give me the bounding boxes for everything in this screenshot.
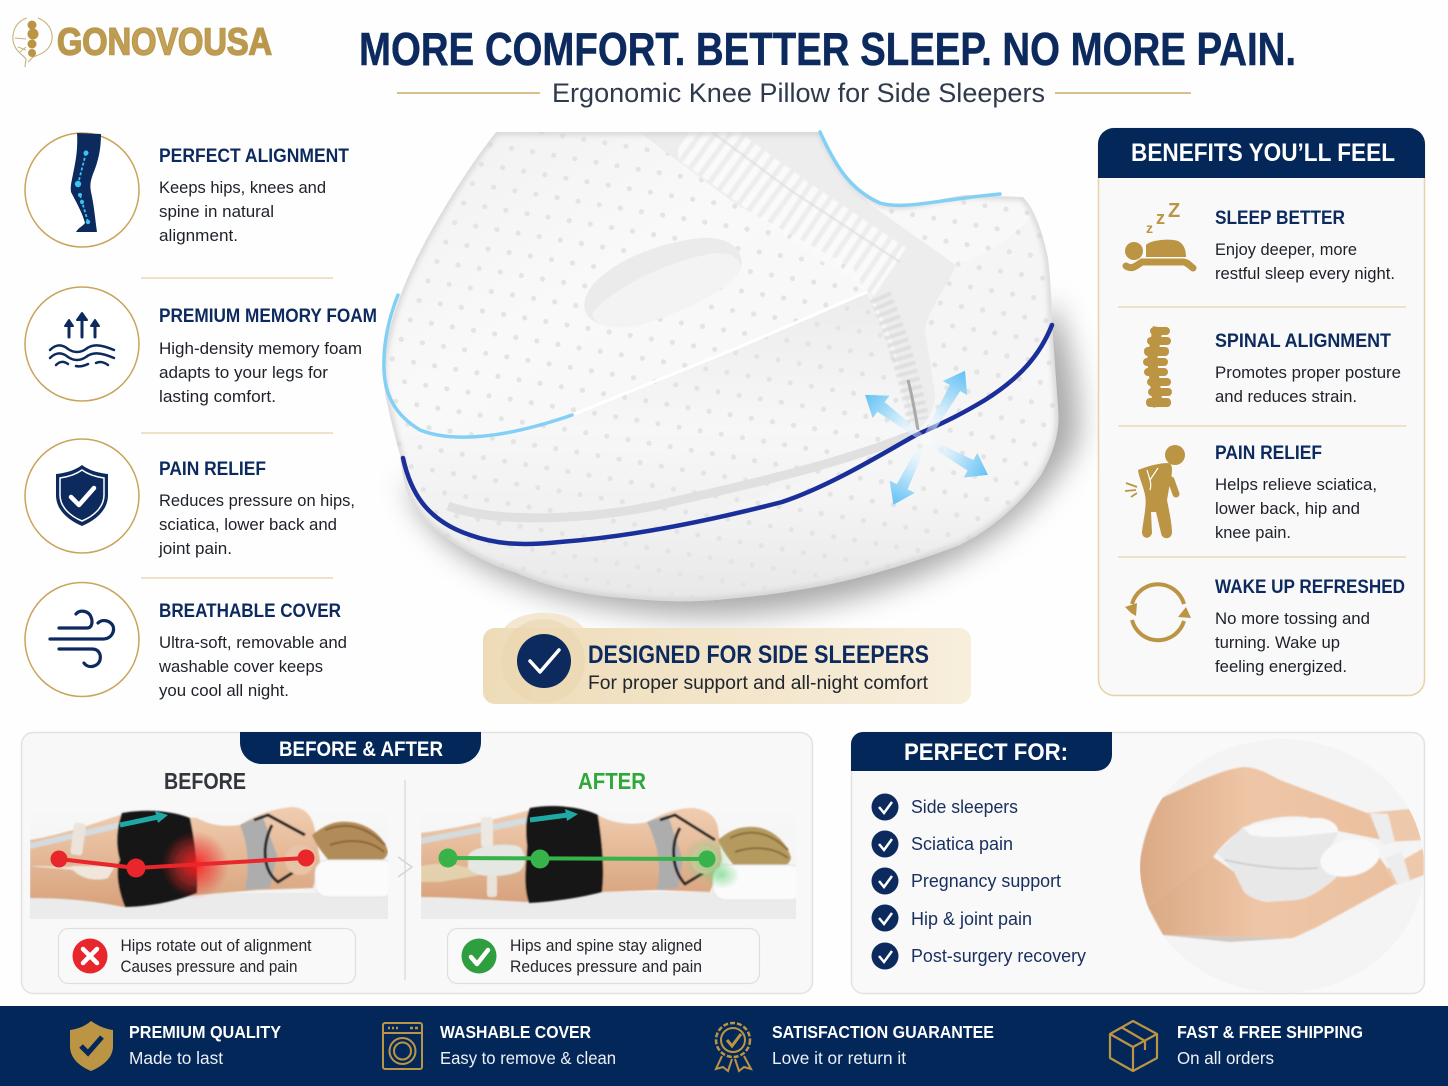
edge shading	[383, 132, 1058, 601]
footer item: washable cover: Easy to remove & clean	[440, 1048, 616, 1068]
callout text: Causes pressure and pain	[120, 958, 298, 976]
text block: feeling energized.	[1215, 657, 1347, 676]
side wall right	[925, 215, 1060, 428]
text block	[158, 491, 355, 558]
list: use cases: Post-surgery recovery	[911, 946, 1086, 966]
text block: Helps relieve sciatica,	[1215, 475, 1377, 494]
zipper flap	[448, 433, 916, 518]
text block: washable cover keeps	[158, 657, 323, 676]
text block: sciatica, lower back and	[159, 515, 337, 534]
text block: restful sleep every night.	[1215, 264, 1395, 283]
text block: High-density memory foam	[159, 339, 362, 358]
heading: PAIN RELIEF	[159, 458, 266, 480]
icon: green check	[462, 938, 496, 974]
list: use cases: Sciatica pain	[911, 834, 1013, 854]
text block: spine in natural	[159, 202, 274, 221]
callout text	[120, 937, 312, 976]
callout text: Hips rotate out of alignment	[120, 937, 312, 955]
icon: gold shield	[70, 1021, 113, 1071]
strap	[639, 132, 956, 432]
tab: perfect for	[851, 732, 1112, 771]
feature: pain relief	[25, 439, 355, 558]
footer bar	[0, 1006, 1448, 1086]
text block: lower back, hip and	[1215, 499, 1360, 518]
footer item: washable cover: WASHABLE COVER	[440, 1022, 591, 1042]
text block: Enjoy deeper, more	[1215, 240, 1357, 259]
panel: left features	[25, 133, 377, 700]
zipper	[403, 325, 1052, 544]
icon: check badge	[517, 634, 571, 688]
text block: lasting comfort.	[159, 387, 276, 406]
text block: joint pain.	[158, 539, 232, 558]
feature: breathable cover	[25, 582, 347, 700]
text block: Reduces pressure on hips,	[159, 491, 355, 510]
icon: sleeping person	[1125, 200, 1193, 268]
benefit: spinal alignment	[1143, 327, 1401, 407]
heading: PREMIUM MEMORY FOAM	[159, 305, 377, 327]
top surface	[498, 138, 502, 142]
tab: before and after: BEFORE & AFTER	[279, 738, 443, 761]
list: use cases: Pregnancy support	[911, 871, 1061, 891]
footer item: shipping: On all orders	[1177, 1048, 1274, 1068]
icon: shield check	[56, 465, 108, 526]
icon: leg alignment	[71, 133, 101, 232]
feature: premium memory foam	[25, 287, 377, 406]
footer item: satisfaction guarantee: Love it or return it	[772, 1048, 906, 1068]
footer item: satisfaction guarantee: SATISFACTION GUARANTEE	[772, 1022, 994, 1042]
feature: perfect alignment	[25, 133, 349, 247]
text block: Ultra-soft, removable and	[159, 633, 347, 652]
icon: foam arrows and waves	[50, 313, 114, 366]
panel header: BENEFITS YOU’LL FEEL	[1131, 139, 1395, 167]
text block	[1215, 609, 1370, 676]
arrow: before to after	[398, 857, 412, 877]
icon: box	[1110, 1021, 1157, 1071]
panel: before and after	[22, 732, 812, 994]
heading: SPINAL ALIGNMENT	[1215, 330, 1391, 352]
image: legs with pillow	[1140, 766, 1424, 943]
footer item: premium quality: Made to last	[129, 1048, 223, 1068]
callout: after result	[448, 928, 760, 984]
text block: Promotes proper posture	[1215, 363, 1401, 382]
heading: BREATHABLE COVER	[159, 600, 341, 622]
text block	[159, 339, 362, 406]
panel header	[1098, 128, 1425, 178]
callout heading: DESIGNED FOR SIDE SLEEPERS	[588, 641, 929, 669]
heading: PAIN RELIEF	[1215, 442, 1322, 464]
text block	[1215, 363, 1401, 406]
icon: person with back pain	[1125, 445, 1185, 538]
brand name: GONOVOUSA	[57, 22, 272, 64]
footer item: shipping	[1110, 1021, 1363, 1071]
benefit: pain relief	[1125, 442, 1377, 542]
panel: benefits	[1098, 128, 1425, 696]
logo	[13, 18, 272, 67]
footer item: satisfaction guarantee	[716, 1022, 994, 1071]
callout text: Reduces pressure and pain	[510, 958, 702, 976]
footer item: washable cover	[383, 1022, 616, 1069]
blue contour lines	[384, 295, 572, 437]
icon: red cross	[72, 938, 108, 974]
icon: wind	[50, 611, 114, 667]
footer item: premium quality	[70, 1021, 281, 1071]
text block: Keeps hips, knees and	[159, 178, 326, 197]
text block	[158, 633, 347, 700]
arrows: pressure relief	[857, 364, 995, 511]
image: after posture	[421, 800, 803, 919]
side wall left	[772, 294, 884, 335]
list: use cases: Side sleepers	[911, 797, 1018, 817]
icon: washing machine	[383, 1023, 422, 1069]
text block: and reduces strain.	[1215, 387, 1357, 406]
icon: sleeping person: z	[1156, 208, 1165, 228]
heading: after: AFTER	[578, 768, 646, 794]
text block: adapts to your legs for	[159, 363, 328, 382]
heading: PERFECT ALIGNMENT	[159, 145, 349, 167]
text block: turning. Wake up	[1215, 633, 1340, 652]
text block	[159, 178, 326, 245]
icon: medal	[716, 1023, 751, 1071]
callout: before result	[58, 928, 356, 984]
hole	[584, 238, 742, 327]
heading: SLEEP BETTER	[1215, 207, 1345, 229]
callout text: Hips and spine stay aligned	[510, 937, 702, 955]
heading: WAKE UP REFRESHED	[1215, 576, 1405, 598]
list: use cases: Hip & joint pain	[911, 909, 1032, 929]
text block: knee pain.	[1215, 523, 1291, 542]
subtitle: Ergonomic Knee Pillow for Side Sleepers	[552, 78, 1045, 108]
callout: designed for side sleepers	[483, 613, 971, 704]
panel: perfect for	[851, 732, 1424, 994]
text block	[1215, 240, 1395, 283]
product image: knee pillow	[370, 125, 1079, 616]
callout text: For proper support and all-night comfort	[588, 673, 929, 694]
tab: before and after	[240, 732, 481, 764]
icon: sleeping person: z	[1146, 220, 1153, 236]
image: before posture	[30, 800, 395, 919]
heading: before: BEFORE	[164, 768, 246, 794]
tab: perfect for: PERFECT FOR:	[904, 739, 1068, 766]
benefit: wake up refreshed	[1125, 576, 1405, 676]
icon: sleeping person: Z	[1168, 200, 1180, 222]
text block: No more tossing and	[1215, 609, 1370, 628]
text block: alignment.	[159, 226, 238, 245]
footer item: shipping: FAST & FREE SHIPPING	[1177, 1022, 1363, 1042]
icon: refresh cycle	[1125, 584, 1191, 640]
list: use cases	[872, 794, 1086, 970]
benefit: sleep better	[1125, 200, 1395, 283]
text block	[1215, 475, 1377, 542]
icon: spine logo mark	[13, 18, 52, 67]
footer item: premium quality: PREMIUM QUALITY	[129, 1022, 281, 1042]
text block: you cool all night.	[159, 681, 289, 700]
callout text	[510, 937, 702, 976]
icon: spine	[1143, 327, 1172, 407]
